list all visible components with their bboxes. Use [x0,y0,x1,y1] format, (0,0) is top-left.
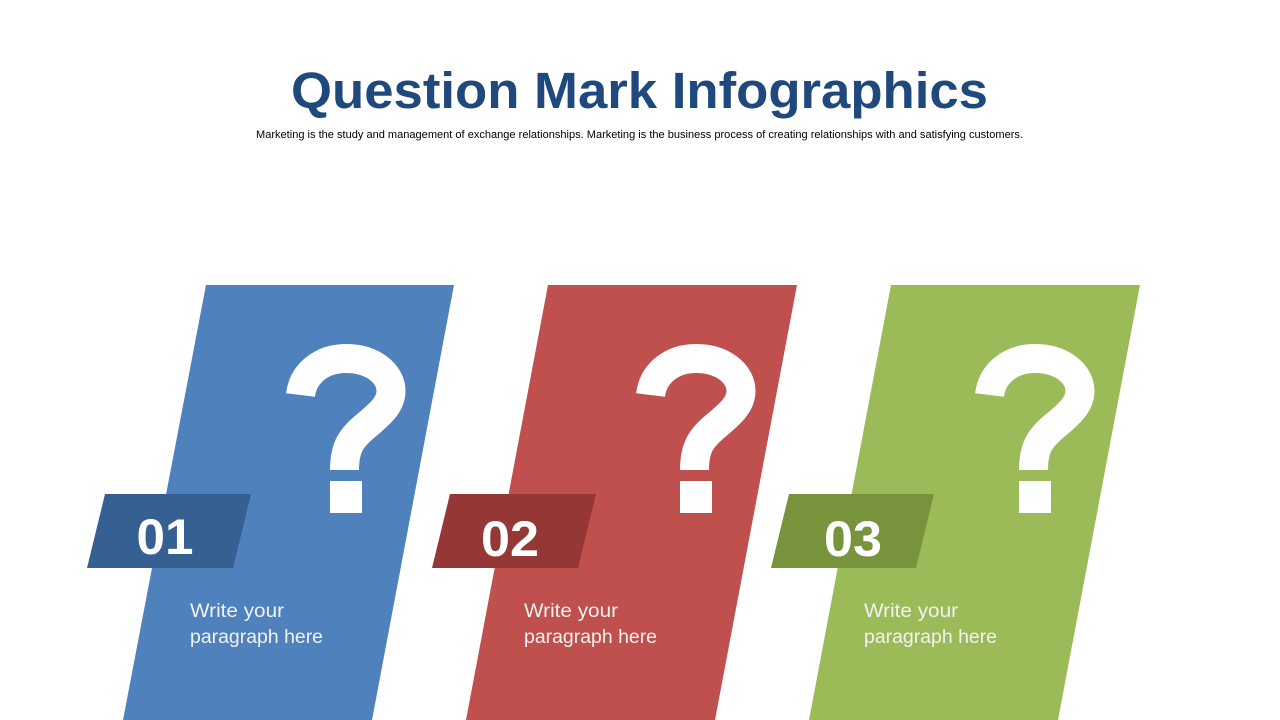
number tag 02 [432,494,596,568]
title: Question Mark Infographics [291,62,988,119]
icon: question mark 2 [650,358,741,513]
paragraph 1: paragraph here [190,627,323,648]
paragraph 3: paragraph here [864,627,997,648]
number tag 03: 03 [824,511,882,567]
number tag 01: 01 [136,509,194,565]
paragraph 3: Write your [864,601,959,622]
panel: blue card 01 [87,285,454,720]
red parallelogram [466,285,797,720]
number tag 03 [771,494,934,568]
number tag 01 [87,494,251,568]
green parallelogram [809,285,1140,720]
paragraph 2: Write your [524,601,619,622]
icon: question mark 3 [990,358,1080,513]
subtitle: Marketing is the study and management of exchange relationships. Marketing is the business process of creating relationships with and satisfying customers. [256,129,1023,141]
paragraph 2: paragraph here [524,627,657,648]
number tag 02: 02 [481,511,539,567]
blue parallelogram [123,285,454,720]
icon: question mark 1 [300,358,391,513]
paragraph 1: Write your [190,601,285,622]
panel: green card 03 [771,285,1140,720]
panel: red card 02 [432,285,797,720]
